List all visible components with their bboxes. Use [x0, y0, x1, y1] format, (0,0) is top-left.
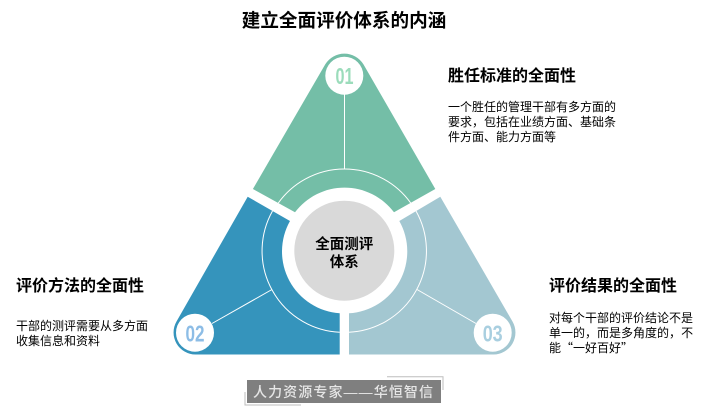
text block: 胜任标准的全面性: 胜任标准的全面性	[448, 66, 576, 85]
segment 01: top green	[253, 54, 435, 212]
segment 03: right light blue	[349, 197, 515, 354]
text block: 评价方法的全面性: 收集信息和资料	[16, 333, 100, 348]
text block: 胜任标准的全面性: 要求，包括在业绩方面、基础条	[448, 113, 616, 130]
text block: 评价方法的全面性: 干部的测评需要从多方面	[16, 318, 148, 333]
text block: 评价结果的全面性: 能“一好百好”	[549, 339, 633, 356]
watermark banner: 人力资源专家——华恒智信	[253, 384, 433, 400]
center circle	[294, 201, 394, 301]
text block: 评价结果的全面性: 评价结果的全面性	[549, 276, 677, 295]
text block: 评价方法的全面性: 评价方法的全面性	[16, 276, 144, 295]
center circle: 体系	[330, 253, 359, 271]
segment 02: left blue: 02	[186, 320, 204, 346]
triangle diagram	[174, 54, 515, 355]
title: 建立全面评价体系的内涵	[242, 10, 446, 31]
text block: 评价方法的全面性	[16, 276, 148, 348]
text block: 评价结果的全面性: 对每个干部的评价结论不是	[549, 310, 693, 325]
segment 03: right light blue: 03	[483, 320, 503, 346]
watermark banner	[245, 377, 443, 405]
text block: 胜任标准的全面性: 一个胜任的管理干部有多方面的	[448, 99, 616, 114]
text block: 评价结果的全面性: 单一的，而是多角度的，不	[549, 324, 693, 341]
text block: 评价结果的全面性	[549, 276, 693, 356]
text block: 胜任标准的全面性: 件方面、能力方面等	[448, 129, 556, 144]
segment 01: top green: 01	[336, 63, 354, 89]
segment 02: left blue	[174, 197, 340, 354]
text block: 胜任标准的全面性	[448, 66, 616, 144]
center circle: 全面测评	[315, 235, 374, 253]
